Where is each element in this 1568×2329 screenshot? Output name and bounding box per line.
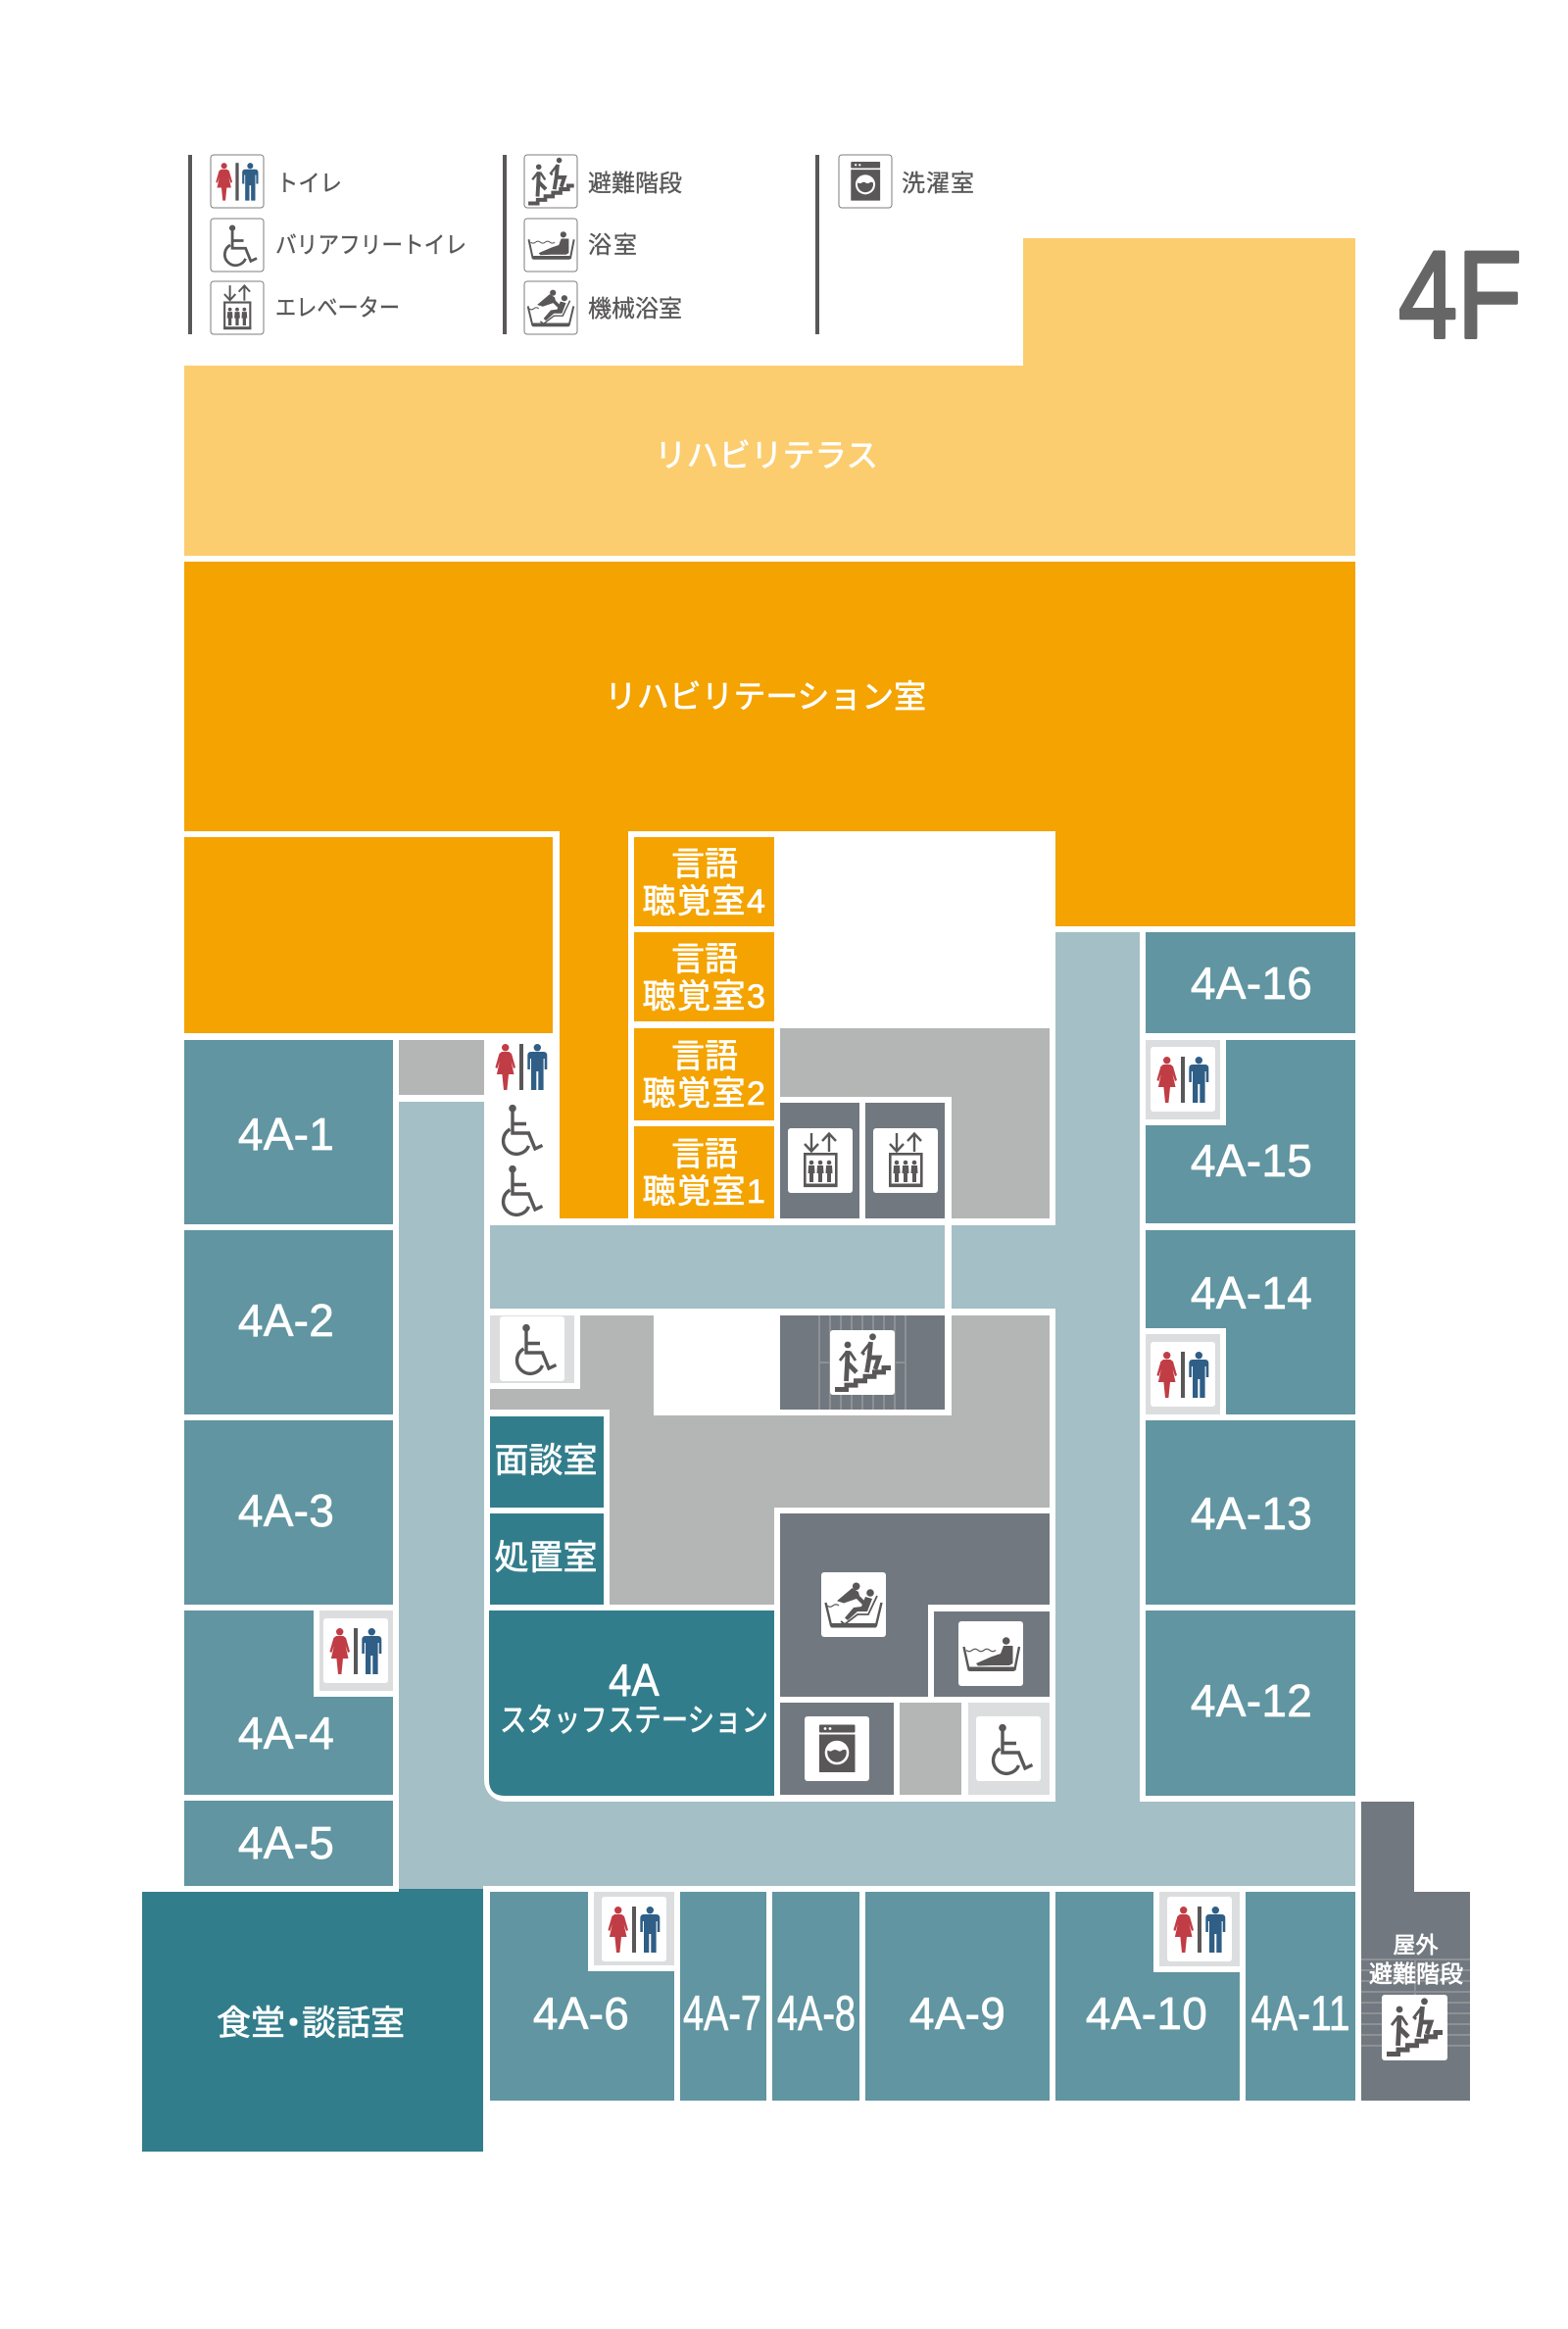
legend label: laundry: 洗濯室: [902, 171, 974, 197]
legend icon: evacuation stairs: [528, 158, 574, 206]
barrier-free toilet upper: [490, 1315, 574, 1383]
legend dividers: [188, 155, 819, 334]
legend icon: elevator: [223, 285, 251, 329]
room 4A-15: [1146, 1040, 1355, 1223]
room 4A-13: 4A-13: [1191, 1488, 1312, 1539]
legend label: bath: 浴室: [588, 232, 637, 259]
barrier-free toilet lower: [968, 1703, 1050, 1795]
room 4A-12: 4A-12: [1191, 1675, 1312, 1726]
room 4A-6: [490, 1892, 674, 2101]
legend icon: toilet: [216, 163, 259, 201]
interview room: 面談室: [494, 1442, 598, 1480]
room 4A-9: 4A-9: [909, 1988, 1005, 2039]
speech and hearing room 3: 言語: [671, 941, 738, 978]
room 4A-16: 4A-16: [1191, 958, 1312, 1009]
room 4A-3: 4A-3: [238, 1485, 334, 1536]
room 4A-1: 4A-1: [238, 1109, 334, 1160]
dining and lounge room: 食堂・談話室: [217, 2005, 405, 2043]
speech and hearing room 1: [634, 1126, 774, 1218]
legend: [188, 155, 974, 334]
legend label: toilet: トイレ: [276, 171, 342, 197]
rehabilitation terrace: [184, 238, 1355, 556]
staff station: スタッフステーション: [500, 1702, 768, 1738]
room 4A-11: 4A-11: [1250, 1986, 1350, 2041]
outdoor evacuation stairs: 屋外: [1394, 1932, 1439, 1957]
legend label: elevator: エレベーター: [275, 295, 400, 322]
legend icon: barrier-free toilet: [224, 224, 257, 266]
room 4A-4: 4A-4: [238, 1708, 334, 1759]
outdoor evacuation stairs: [1361, 1802, 1470, 2101]
room 4A-6: 4A-6: [533, 1988, 629, 2039]
room 4A-15: 4A-15: [1191, 1135, 1312, 1186]
laundry room: [780, 1703, 894, 1795]
room 4A-3: [184, 1420, 393, 1605]
room 4A-9: [865, 1892, 1050, 2101]
speech and hearing room 3: 聴覚室3: [643, 978, 766, 1016]
legend icon: bath: [528, 231, 574, 260]
mechanical bath room: [780, 1513, 1050, 1697]
room 4A-5: 4A-5: [238, 1817, 334, 1868]
room 4A-10: 4A-10: [1086, 1988, 1207, 2039]
room 4A-11: [1246, 1892, 1355, 2101]
legend label: mechanical bath: 機械浴室: [588, 296, 682, 322]
bath room: [934, 1611, 1050, 1697]
room 4A-14: 4A-14: [1191, 1267, 1312, 1318]
speech and hearing room 2: 聴覚室2: [643, 1075, 766, 1113]
dining and lounge room: [142, 1889, 483, 2152]
room 4A-13: [1146, 1420, 1355, 1605]
treatment room: 処置室: [494, 1539, 598, 1577]
speech and hearing room 1: 聴覚室1: [643, 1173, 766, 1211]
corridor: [399, 932, 1355, 1889]
legend label: barrier-free toilet: バリアフリートイレ: [275, 232, 466, 259]
room 4A-16: [1146, 932, 1355, 1033]
elevator 2: [865, 1103, 945, 1218]
floor label 4F: 4F: [1398, 225, 1522, 364]
legend label: evacuation stairs: 避難階段: [588, 171, 682, 197]
legend icon: mechanical bath: [528, 290, 573, 326]
gray service areas: [399, 1028, 1050, 1795]
speech and hearing room 4: 聴覚室4: [643, 883, 766, 920]
room 4A-8: [772, 1892, 859, 2101]
staff station: 4A: [609, 1655, 660, 1706]
room 4A-8: 4A-8: [777, 1986, 856, 2041]
room 4A-7: 4A-7: [683, 1986, 761, 2041]
rehabilitation room: [184, 562, 1355, 1218]
staff station: [489, 1610, 774, 1796]
speech and hearing room 4: 言語: [671, 846, 738, 883]
evacuation stairs inner: [780, 1315, 945, 1410]
room 4A-7: [680, 1892, 766, 2101]
rehabilitation room: リハビリテーション室: [605, 678, 926, 715]
room 4A-1: [184, 1040, 393, 1224]
room 4A-12: [1146, 1610, 1355, 1796]
room 4A-10: [1055, 1892, 1240, 2101]
legend tiles: [211, 155, 892, 334]
room 4A-4: [184, 1610, 393, 1795]
speech and hearing room 3: [634, 932, 774, 1021]
speech and hearing room 2: [634, 1028, 774, 1120]
speech and hearing room 2: 言語: [671, 1038, 738, 1075]
rehabilitation terrace: リハビリテラス: [655, 437, 878, 473]
treatment room: [490, 1513, 604, 1605]
speech and hearing room 1: 言語: [671, 1136, 738, 1173]
room 4A-5: [184, 1801, 393, 1886]
outdoor evacuation stairs: 避難階段: [1369, 1961, 1463, 1988]
elevator 1: [780, 1103, 859, 1218]
speech and hearing room 4: [634, 837, 774, 926]
room 4A-14: [1146, 1230, 1355, 1414]
room 4A-2: 4A-2: [238, 1295, 334, 1346]
room 4A-2: [184, 1230, 393, 1414]
legend icon: laundry: [851, 162, 880, 201]
restroom icons by corridor: [495, 1044, 547, 1214]
orange room upper left: [184, 837, 553, 1033]
interview room: [490, 1416, 604, 1508]
